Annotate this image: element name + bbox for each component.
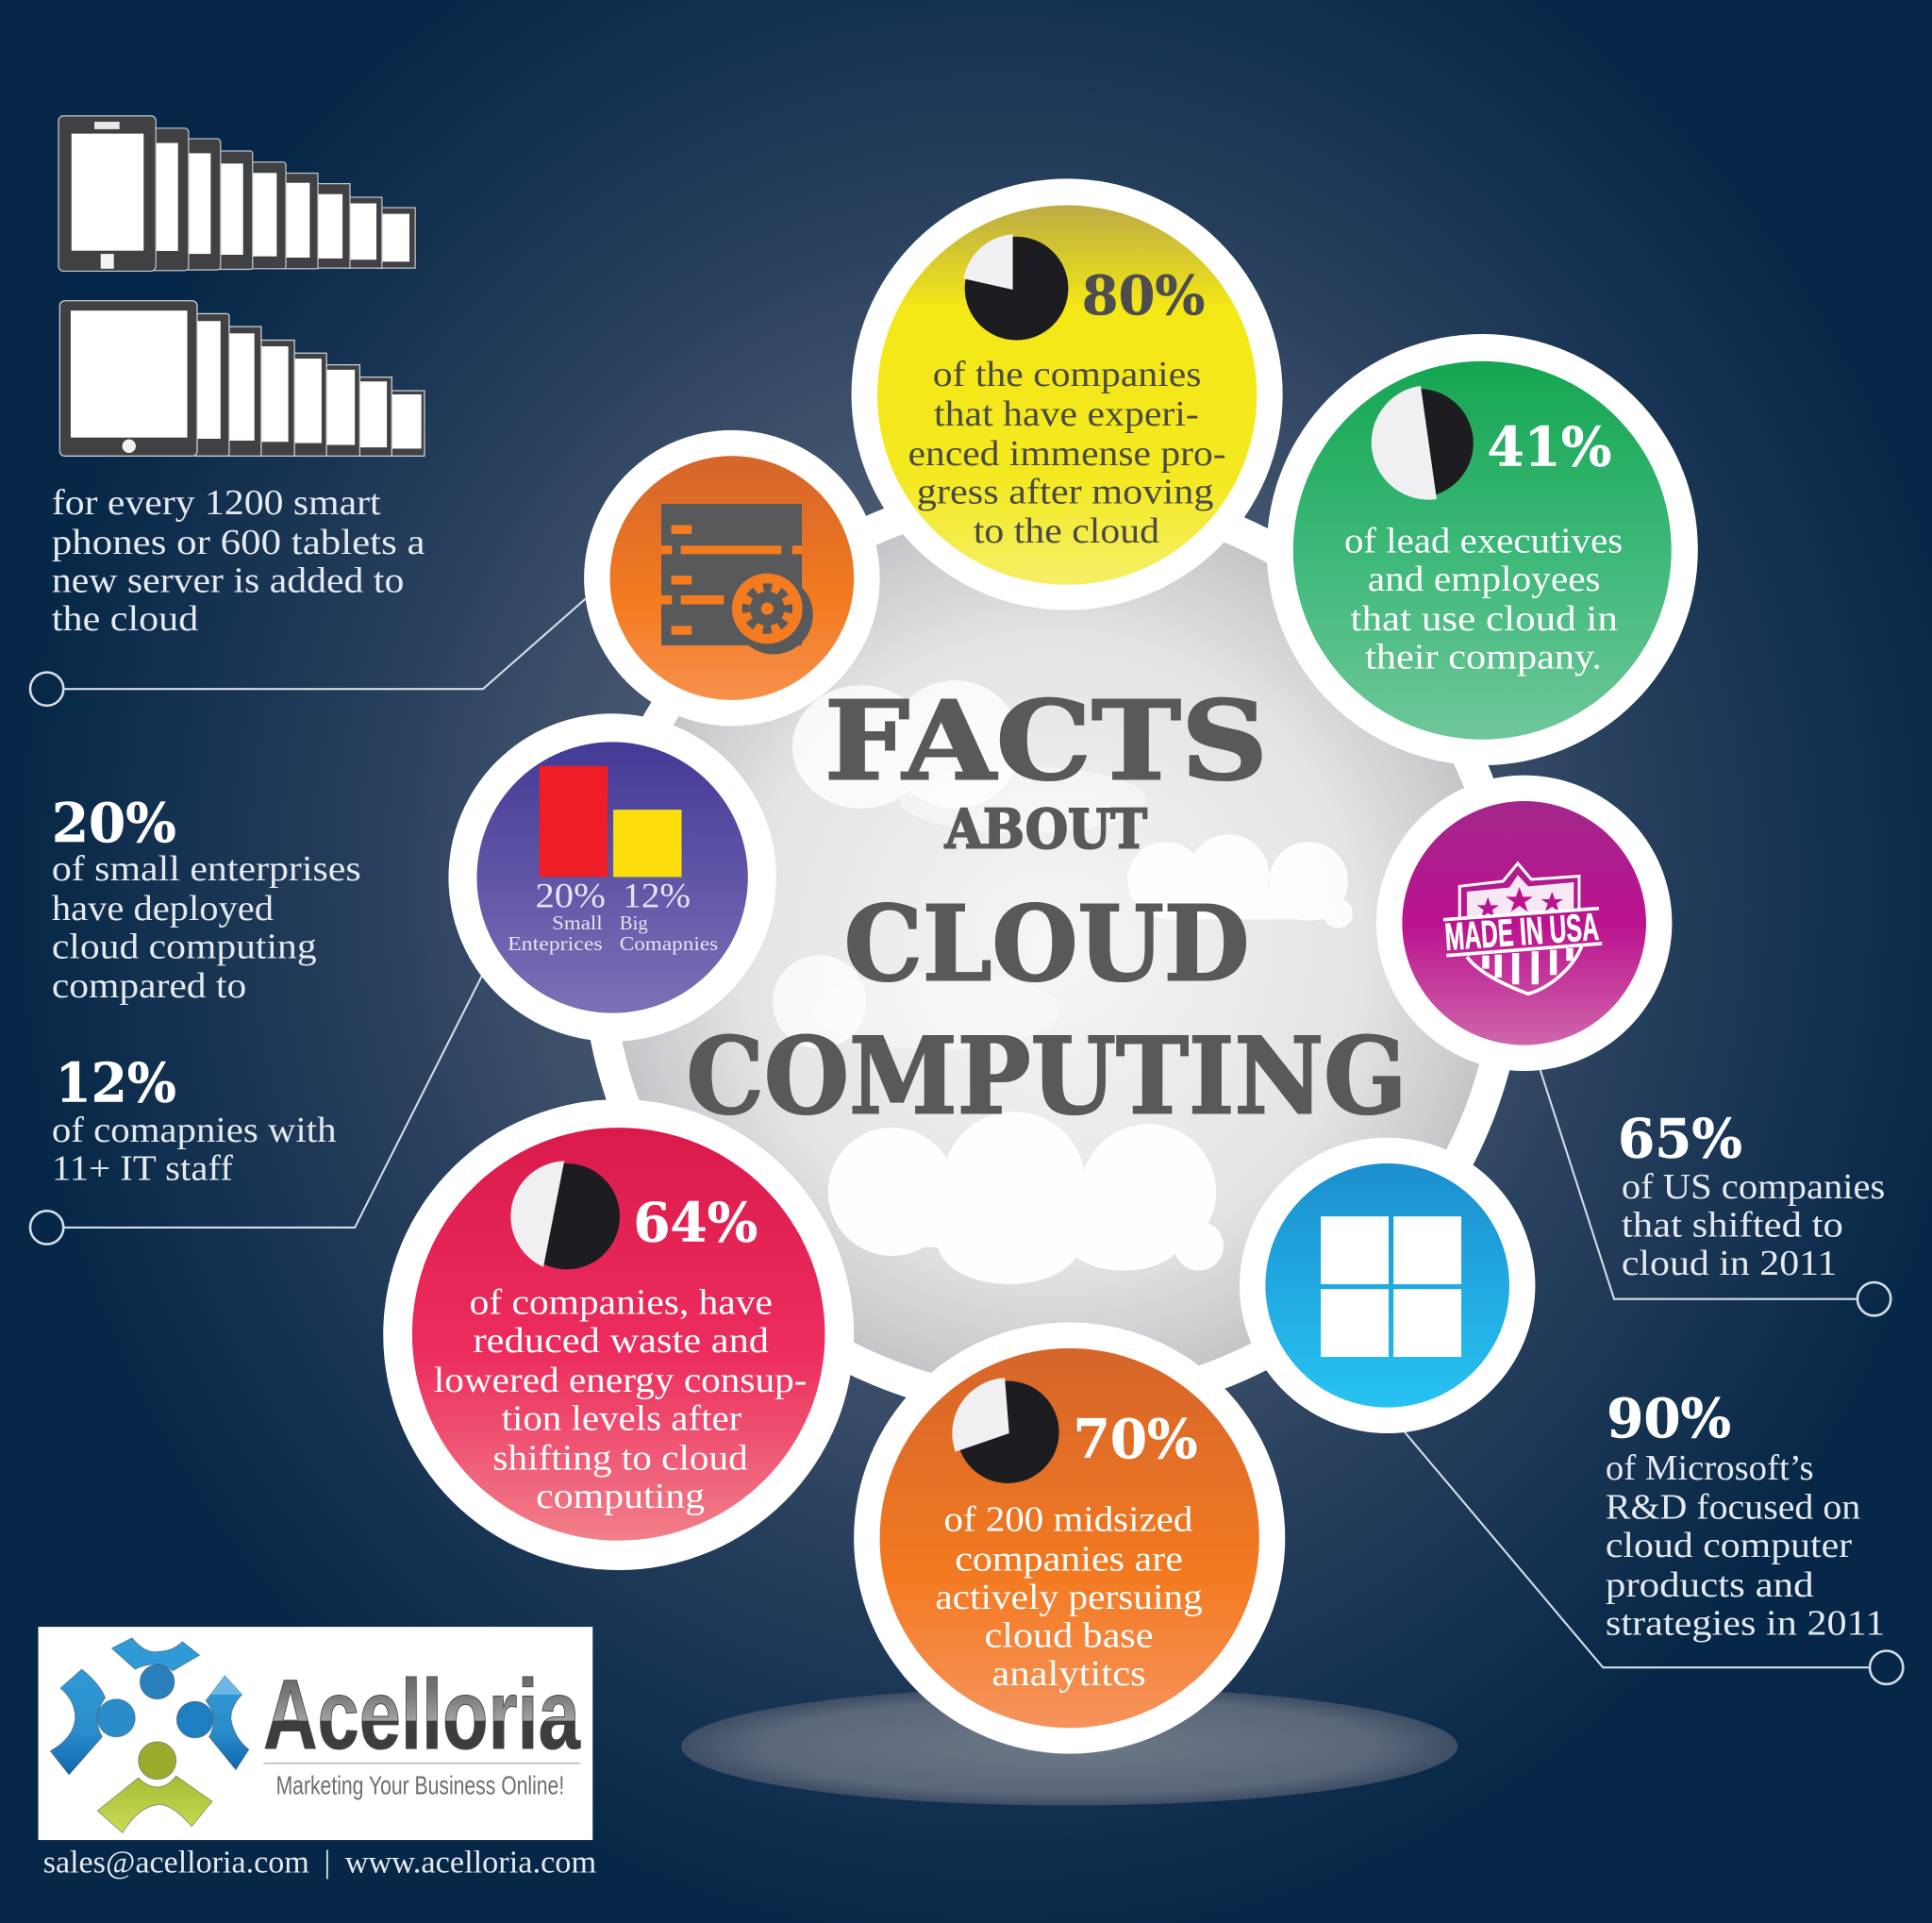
panel: server icon circle [584,430,880,726]
panel: red 64% [383,1099,854,1570]
panel: windows circle [1240,1138,1535,1433]
text: 80% description: enced immense pro- [908,434,1226,474]
icon: shrinking phones [58,116,415,271]
footer contact [43,1845,596,1880]
stat: 12% companies [52,1051,337,1188]
text: 64% description: of companies, have [470,1283,773,1323]
bar labels [508,876,718,955]
text: 41% description: and employees [1368,560,1601,599]
pie 64% [510,1161,620,1269]
footer contact: www.acelloria.com [345,1845,596,1880]
text: 41% description: their company. [1365,637,1602,677]
stat: 20% small enterprises: cloud computing [52,927,317,966]
stat: 65% US companies: of US companies [1622,1167,1885,1207]
icon: windows [1321,1216,1461,1357]
title: CLOUD [844,882,1249,1004]
text: 70% description: of 200 midsized [943,1500,1192,1540]
stat: 90% Microsoft: R&D focused on [1606,1488,1860,1528]
icon: shrinking tablets [59,301,425,456]
stat: 90% Microsoft [1606,1386,1885,1643]
bar chart [540,766,682,877]
bar labels: Enteprices [508,932,603,955]
stat: 65% US companies: 65% [1618,1106,1742,1170]
stat: 20% small enterprises: 20% [52,791,176,855]
text: 80% description: of the companies [933,355,1201,394]
value 80%: 80% [1082,263,1205,327]
text: 41% description: that use cloud in [1351,599,1618,639]
stat: 20% small enterprises: of small enterprises [52,849,361,889]
footer contact: sales@acelloria.com [43,1845,309,1880]
value 64%: 64% [633,1190,758,1254]
stat: 90% Microsoft: strategies in 2011 [1606,1603,1885,1643]
text: 64% description: reduced waste and [474,1321,769,1361]
text: 64% description: shifting to cloud [492,1438,748,1478]
title: COMPUTING [687,1015,1407,1138]
text: 70% description [935,1500,1203,1694]
icon: Acelloria mark [50,1638,249,1832]
stat: 90% Microsoft: products and [1606,1565,1814,1605]
text: 70% description: actively persuing [935,1578,1203,1617]
bar labels: Big [620,911,648,934]
value 41%: 41% [1487,415,1611,479]
stat: 65% US companies: that shifted to [1622,1205,1843,1245]
title [687,677,1407,1138]
text: server note: new server is added to [52,560,404,600]
logo tagline: Marketing Your Business Online! [276,1771,564,1800]
text: 41% description: of lead executives [1344,522,1623,561]
title: ABOUT [944,797,1147,861]
icon: made in USA badge: MADE IN USA [1443,905,1600,959]
bar labels: 12% [623,876,691,914]
stat: 12% companies: 12% [56,1051,176,1115]
stat: 20% small enterprises: have deployed [52,889,274,928]
logo wordmark: Acelloria [263,1660,580,1770]
stat: 12% companies: 11+ IT staff [52,1148,233,1188]
text: 80% description: gress after moving [917,472,1214,511]
icon: made in USA badge [1443,863,1602,994]
panel: purple bar chart [448,713,776,1042]
text: server note: phones or 600 tablets a [52,523,425,562]
bar labels: Small [552,911,603,934]
panel: yellow 80% [852,178,1283,610]
pie 80% [963,234,1068,341]
text: 64% description: computing [536,1477,705,1516]
stat: 65% US companies: cloud in 2011 [1622,1244,1837,1283]
bar labels: Comapnies [620,932,718,955]
panel: made in USA circle [1376,776,1672,1071]
clouds [773,680,1353,1284]
text: 70% description: companies are [955,1539,1183,1579]
text: server note: the cloud [52,599,198,639]
text: 80% description: to the cloud [974,511,1159,551]
stat: 20% small enterprises: compared to [52,966,246,1006]
text: server note: for every 1200 smart [52,483,381,523]
connector: made in USA to note [1541,1070,1890,1315]
text: 80% description: that have experi- [934,394,1199,434]
text: 41% description [1344,522,1623,677]
text: 70% description: analytitcs [991,1654,1146,1694]
pie 41% [1372,386,1474,500]
connector: windows to note [1405,1432,1903,1684]
text: server note [52,483,425,639]
stat: 12% companies: of comapnies with [52,1111,337,1150]
logo: Acelloria [38,1627,592,1840]
bar labels: 20% [536,876,606,914]
value 70%: 70% [1074,1407,1198,1471]
panel: green 41% [1267,334,1698,765]
connector: bar chart to note [30,974,483,1245]
text: 64% description: lowered energy consup- [434,1361,808,1400]
icon: server with gear [661,504,813,654]
stat: 90% Microsoft: 90% [1607,1386,1731,1450]
stat: 90% Microsoft: of Microsoft’s [1606,1448,1814,1488]
stat: 90% Microsoft: cloud computer [1606,1526,1852,1565]
stat: 65% US companies [1618,1106,1885,1283]
title: FACTS [824,677,1268,805]
stat: 20% small enterprises [52,791,361,1006]
central disc [581,477,1525,1421]
footer contact: | [325,1845,330,1880]
panel: orange 70% [854,1322,1285,1754]
pie 70% [952,1378,1059,1483]
text: 70% description: cloud base [985,1615,1154,1655]
floor shadow ellipse [681,1687,1457,1805]
text: 64% description [434,1283,808,1516]
text: 80% description [908,355,1226,551]
text: 64% description: tion levels after [502,1399,741,1439]
connector: server to note [30,599,585,706]
